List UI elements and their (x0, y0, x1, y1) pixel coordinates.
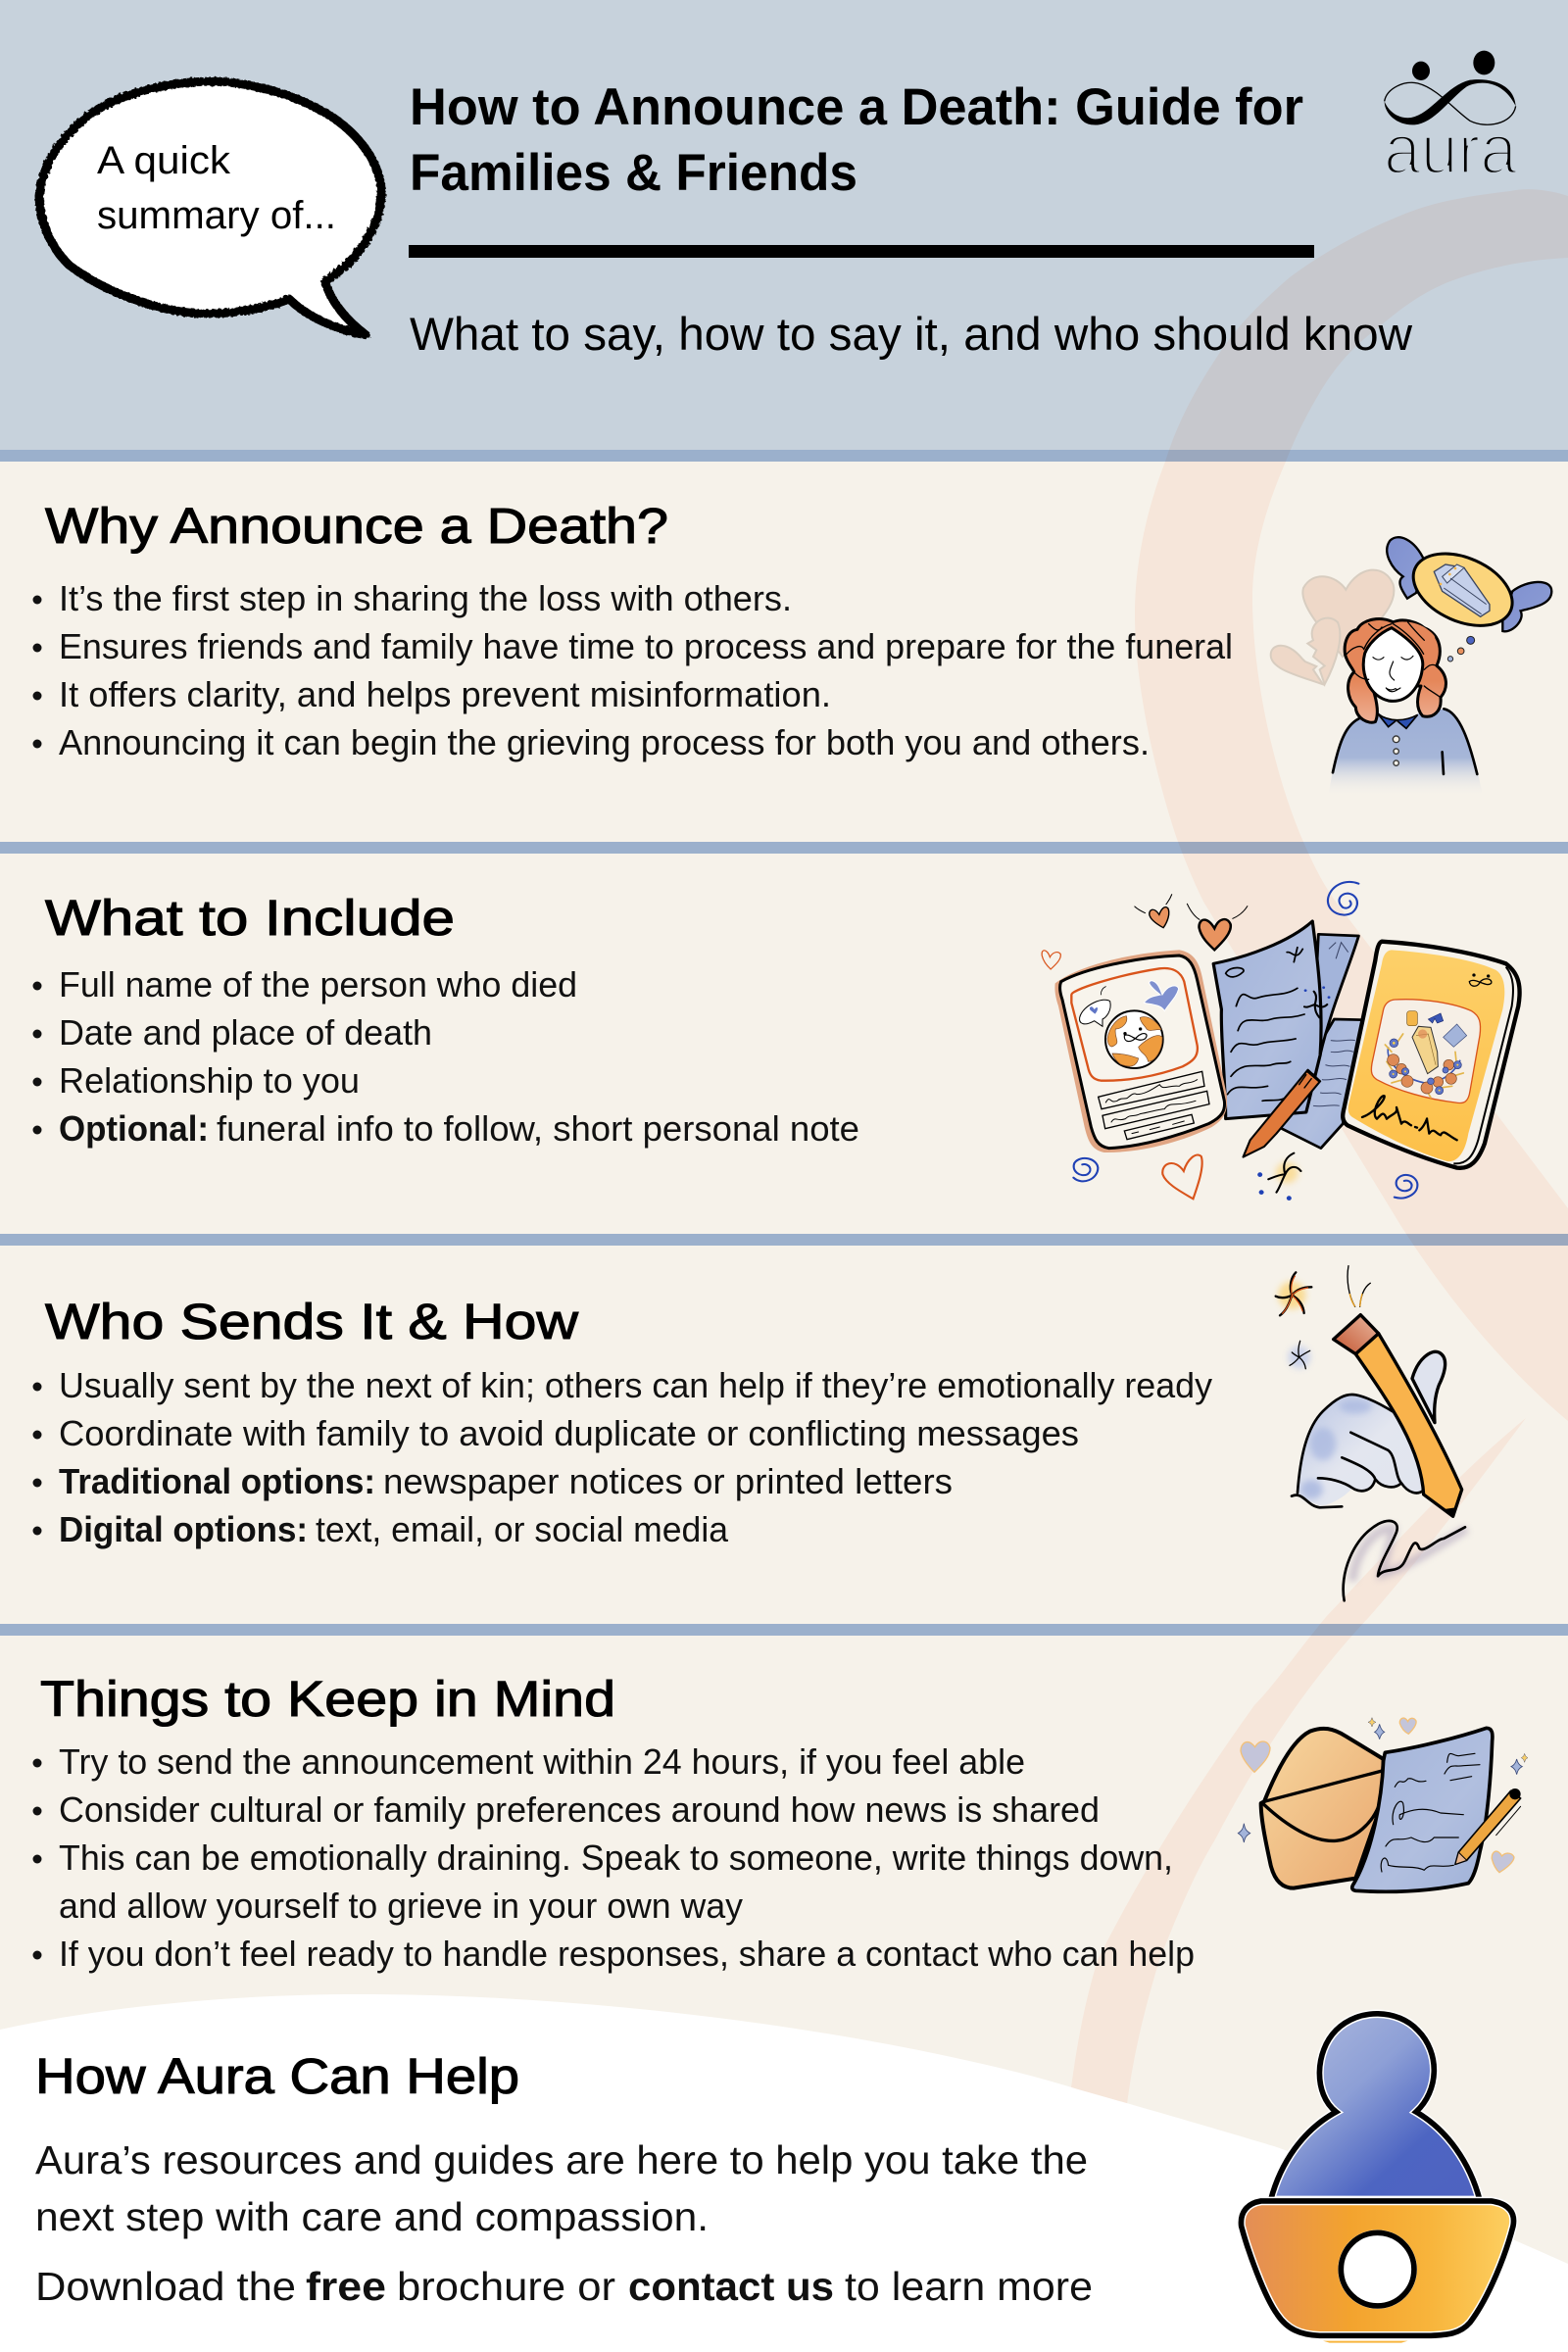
illustration: hand writing with pencil (1276, 1266, 1467, 1600)
bullet list: Announcing it can begin the grieving process for both you and others. (59, 722, 1150, 762)
title: How to Announce a Death: Guide for (410, 78, 1303, 136)
bullet list: If you don’t feel ready to handle responses, share a contact who can help (59, 1934, 1195, 1974)
panel: why announce a death (33, 498, 1551, 797)
icon: sparkles (1238, 1724, 1522, 1881)
bullet list: Full name of the person who died (59, 964, 577, 1004)
icon: pencil (1244, 1070, 1320, 1157)
heading: What to Include (45, 890, 455, 946)
title (410, 78, 1303, 202)
speech bubble: A quick (97, 139, 231, 182)
call to action: contact us (628, 2264, 834, 2309)
panel: things to keep in mind (33, 1671, 1528, 1974)
panel: what to include (33, 882, 1520, 1200)
bullet list: Coordinate with family to avoid duplicate or conflicting messages (59, 1413, 1079, 1453)
bullet list: Ensures friends and family have time to process and prepare for the funeral (59, 626, 1233, 666)
heading: Things to Keep in Mind (40, 1671, 615, 1727)
speech bubble (39, 81, 381, 335)
icon: stars (1276, 1266, 1370, 1369)
bullet list (33, 964, 859, 1149)
call to action: Download the (35, 2264, 296, 2309)
illustration: grieving woman with thought bubble (1271, 537, 1551, 797)
panel: who sends it and how (33, 1266, 1467, 1600)
laptop (1241, 2201, 1514, 2343)
call to action: brochure or (397, 2264, 615, 2309)
bullet list: Relationship to you (59, 1060, 360, 1101)
person (1271, 2014, 1480, 2200)
icon: star bursts (1276, 1162, 1298, 1183)
pencil (1455, 1790, 1521, 1864)
bullet list: It’s the first step in sharing the loss with others. (59, 578, 792, 618)
bullet list (33, 1365, 1212, 1549)
title rule (409, 245, 1314, 258)
pencil (1355, 1334, 1462, 1516)
speech bubble: summary of... (97, 194, 336, 237)
logo: aura (1384, 51, 1517, 189)
thought dots (1467, 636, 1475, 644)
logo: aura: aura (1384, 112, 1517, 189)
collar (1378, 713, 1418, 728)
bullet list: Traditional options: (59, 1461, 375, 1501)
bullet list: Date and place of death (59, 1012, 432, 1053)
bullet list (33, 1741, 1195, 1974)
back page (1280, 1019, 1364, 1149)
bullet list: Consider cultural or family preferences around how news is shared (59, 1789, 1100, 1830)
subtitle: What to say, how to say it, and who should know (410, 308, 1413, 360)
icon: spirals (1073, 882, 1417, 1199)
bullet list: This can be emotionally draining. Speak to someone, write things down, (59, 1838, 1173, 1878)
bullet list (33, 578, 1233, 762)
card: notice with globe (1054, 950, 1227, 1152)
bullet list: Optional: (59, 1108, 209, 1149)
panel: how aura can help (35, 2014, 1514, 2343)
body text: Aura’s resources and guides are here to help you take the (35, 2137, 1088, 2182)
buttons (1393, 736, 1399, 765)
illustration: person with laptop (1241, 2014, 1514, 2343)
thumb (1412, 1351, 1446, 1423)
panel: header (39, 51, 1517, 360)
body (1328, 709, 1483, 797)
title: Families & Friends (410, 144, 858, 202)
name lines (1099, 1071, 1209, 1140)
heading: Who Sends It & How (45, 1294, 578, 1349)
icon: chat bubble (1080, 1000, 1110, 1026)
white closing area (0, 1994, 1568, 2352)
bullet list: text, email, or social media (316, 1509, 729, 1549)
icon: pale hearts (1271, 570, 1394, 684)
bullet list: It offers clarity, and helps prevent misinformation. (59, 674, 831, 714)
background ribbon (1063, 189, 1568, 2156)
envelope (1261, 1729, 1384, 1888)
icon: globe (1105, 1010, 1163, 1068)
call to action: free (306, 2264, 386, 2309)
laptop logo circle (1338, 2230, 1417, 2309)
illustration: cards and letters (1042, 882, 1520, 1200)
bullet list: and allow yourself to grieve in your own way (59, 1886, 743, 1926)
bullet list: newspaper notices or printed letters (383, 1461, 953, 1501)
bullet list: Usually sent by the next of kin; others can help if they’re emotionally ready (59, 1365, 1212, 1405)
heading: Why Announce a Death? (45, 498, 668, 554)
body text: next step with care and compassion. (35, 2194, 709, 2239)
mini logo (1469, 979, 1492, 986)
icon: hearts (1241, 1718, 1514, 1873)
pages, hearts and spirals (1042, 882, 1417, 1200)
bullet list: Try to send the announcement within 24 hours, if you feel able (59, 1741, 1025, 1782)
bullet list: Digital options: (59, 1509, 308, 1549)
face (1363, 628, 1423, 701)
call to action: to learn more (845, 2264, 1093, 2309)
icon: butterfly (1144, 981, 1179, 1011)
hand (1298, 1395, 1424, 1506)
signature (1362, 1096, 1457, 1140)
icon: coffin and wreath (1412, 1026, 1438, 1074)
body text (35, 2137, 1088, 2239)
wings (1387, 537, 1424, 599)
hair (1345, 619, 1446, 722)
icon: small hearts (1042, 895, 1248, 1199)
card: yellow tablet (1343, 942, 1520, 1168)
heading: How Aura Can Help (35, 2048, 519, 2104)
letter (1352, 1728, 1493, 1891)
illustration: envelope and letter (1238, 1718, 1528, 1891)
front page (1213, 921, 1321, 1119)
bullet list: funeral info to follow, short personal note (217, 1108, 859, 1149)
signature scribble (1352, 1529, 1467, 1581)
call to action (35, 2264, 1093, 2309)
thought bubble with coffin (1402, 539, 1524, 640)
bangs (1358, 621, 1435, 655)
